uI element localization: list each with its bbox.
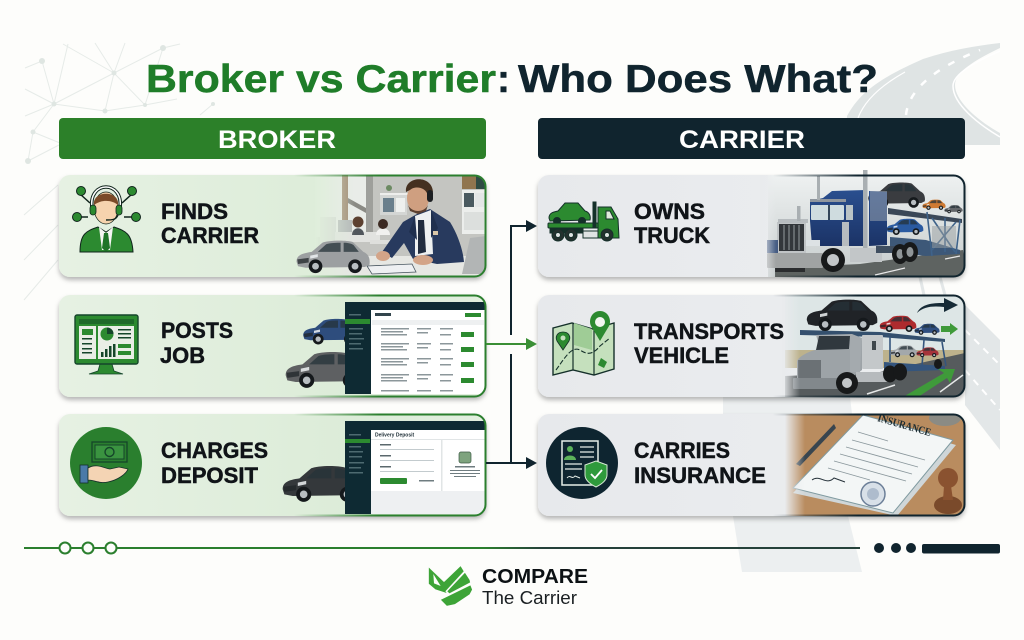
label: charges deposit (161, 438, 268, 488)
photo: silver car hauler with arrows (782, 295, 965, 397)
arrow: posts job to transports vehicle (486, 338, 537, 350)
logo: compare the carrier (428, 565, 588, 608)
background road: top right (845, 43, 1000, 145)
label: charges deposit: DEPOSIT (161, 463, 258, 488)
icon: map with pin (553, 311, 614, 375)
arrow: broker to owns truck and insurance (486, 220, 537, 469)
header: carrier: CARRIER (679, 126, 805, 154)
panel: carries insurance (538, 410, 965, 516)
photo: insurance document (785, 410, 965, 516)
photo: load board with cars (286, 302, 485, 394)
label: carries insurance (634, 438, 766, 488)
logo mark (428, 565, 473, 606)
label: owns truck (634, 199, 711, 248)
label: finds carrier: FINDS (161, 199, 228, 224)
header: broker: BROKER (218, 126, 336, 154)
icon: agent with headset (72, 186, 140, 252)
photo: blue car hauler truck (760, 170, 965, 277)
photo: insurance document: INSURANCE (876, 412, 932, 439)
logo: compare the carrier: The Carrier (482, 588, 577, 608)
label: posts job (160, 318, 233, 368)
title: : (497, 58, 510, 101)
label: charges deposit: CHARGES (161, 438, 268, 463)
title: Who Does What? (518, 58, 878, 101)
title (146, 58, 878, 101)
photo: broker at desk (297, 175, 486, 277)
icon: monitor dashboard (75, 315, 138, 374)
label: posts job: JOB (160, 343, 205, 368)
label: owns truck: TRUCK (634, 223, 711, 248)
background road: bottom center (723, 397, 862, 572)
label: transports vehicle: VEHICLE (634, 343, 729, 368)
header: broker (59, 118, 486, 159)
background road: right side (920, 277, 1000, 450)
footer divider (24, 542, 1000, 554)
header: carrier (538, 118, 965, 159)
photo: deposit form with car: Delivery Deposit (375, 432, 415, 438)
panel: owns truck (538, 170, 965, 277)
panel: charges deposit (59, 414, 486, 516)
panel: transports vehicle (538, 295, 965, 397)
label: owns truck: OWNS (634, 199, 705, 224)
panel: posts job (59, 295, 486, 397)
panel: finds carrier (59, 175, 486, 277)
label: transports vehicle (634, 319, 784, 368)
label: finds carrier: CARRIER (161, 223, 259, 248)
label: carries insurance: CARRIES (634, 438, 730, 463)
background network pattern (24, 43, 215, 300)
logo: compare the carrier: COMPARE (482, 566, 588, 588)
label: finds carrier (161, 199, 259, 248)
icon: document with shield (546, 427, 618, 499)
label: carries insurance: INSURANCE (634, 463, 766, 488)
icon: car on flatbed truck (548, 202, 619, 241)
label: posts job: POSTS (161, 318, 233, 343)
photo: deposit form with car (283, 421, 485, 514)
title: Broker vs Carrier (146, 58, 496, 101)
icon: hand with money (70, 427, 142, 499)
label: transports vehicle: TRANSPORTS (634, 319, 784, 344)
